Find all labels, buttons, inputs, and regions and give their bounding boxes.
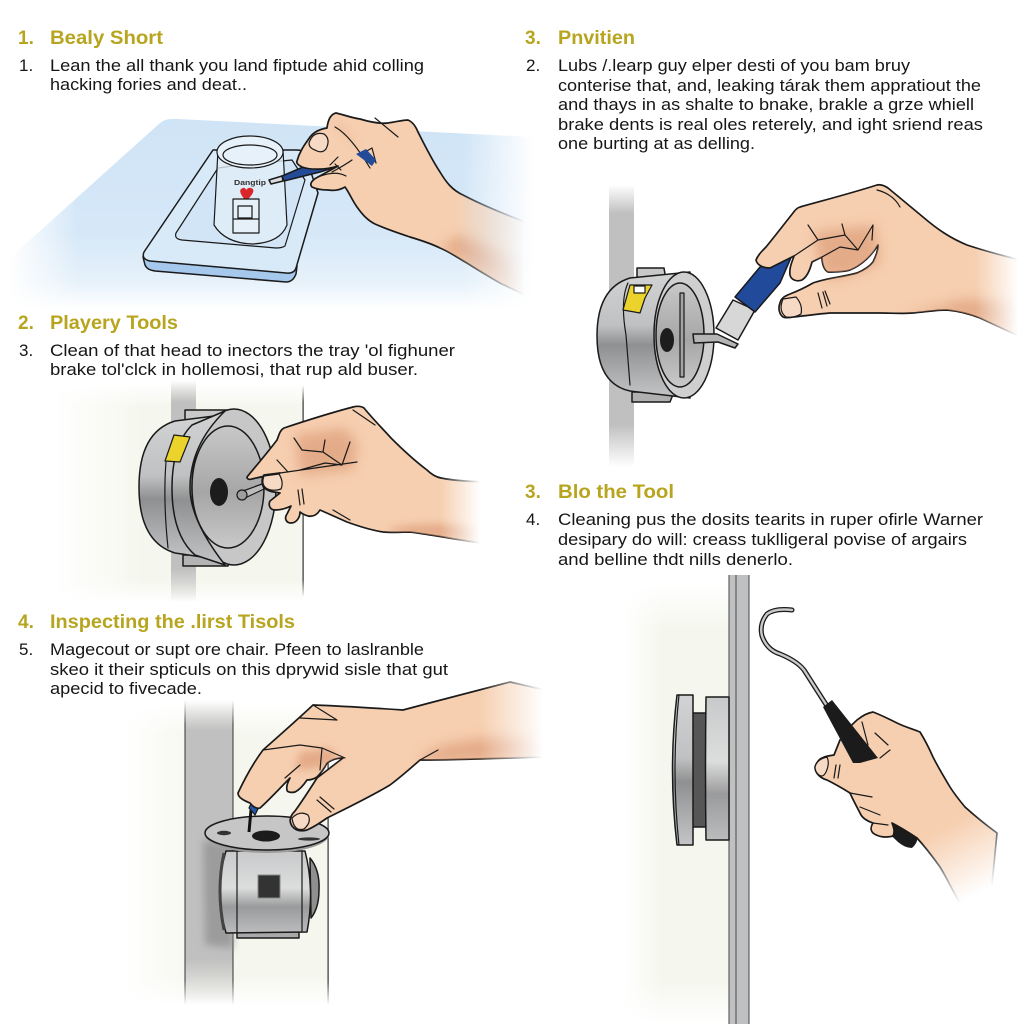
text block: step 2 instructions: 2. [526,56,540,75]
text block: step 3 instructions: Clean of that head to inectors the tray 'ol fighuner [50,341,455,360]
illustration: hand placing tool into jar on blue tray [24,112,524,300]
heading: Blo the Tool: Blo the Tool [558,482,674,503]
text block: step 1 instructions: Lean the all thank you land fiptude ahid colling [50,56,424,75]
text block: step 1 instructions [19,56,424,94]
wall background [55,385,303,602]
text block: step 4 instructions: and belline thdt nills denerlo. [558,550,793,569]
cylinder [220,851,319,938]
text block: step 5 instructions: Magecout or supt ore chair. Pfeen to laslranble [50,640,424,659]
drum [597,268,714,402]
text block: step 4 instructions [526,510,983,569]
wall edge [302,385,304,597]
pen [269,155,345,184]
tray [143,150,318,282]
drum [139,409,276,566]
text block: step 3 instructions: 3. [19,341,33,360]
heading: Bealy Short: 1. [18,28,34,49]
panel: step 2 text [525,28,983,153]
illustration: brake drum with tool, upper right [597,185,1024,467]
screwdriver [249,788,262,832]
illustration: hook tool and drum side view, lower right [625,575,997,1024]
vertical post [609,185,634,467]
text block: step 2 instructions: brake dents is real oles reterely, and ight sriend reas [558,115,983,134]
text block: step 4 instructions: Cleaning pus the dosits tearits in ruper ofirle Warner [558,510,983,529]
text block: step 1 instructions: 1. [19,56,33,75]
hand [756,185,1024,338]
text block: step 2 instructions [526,56,983,153]
text block: step 5 instructions [19,640,448,698]
hand [238,682,545,831]
wall edge [328,710,329,1005]
plate [205,816,329,853]
vertical post [729,575,749,1024]
yellow tag [623,285,652,313]
heading: Pnvitien [525,28,635,49]
panel: step 3 text [18,313,455,379]
post [184,700,234,1005]
text block: step 1 instructions: hacking fories and deat.. [50,75,247,94]
pin [243,484,264,498]
text block: step 2 instructions: conterise that, and, leaking tárak them appratiout the [558,76,981,95]
heading: Inspecting the first tools: Inspecting the .lirst Tisols [50,612,295,633]
glass jar [214,136,287,244]
panel: step 5 text [18,612,448,698]
heading: Pnvitien: Pnvitien [558,28,635,49]
heart [240,188,253,201]
blue work surface [8,112,534,317]
text block: step 4 instructions: desipary do will: creass tuklligeral povise of argairs [558,530,967,549]
text block: step 3 instructions: brake tol'clck in hollemosi, that rup ald buser. [50,360,418,379]
tool handle [823,700,878,763]
wall background [625,585,729,1024]
heading: Playery Tools: Playery Tools [50,313,178,334]
panel: step 1 text [18,28,424,94]
text block: step 4 instructions: 4. [526,510,540,529]
hand [297,113,530,298]
hand [815,712,997,905]
text block: step 2 instructions: Lubs /.learp guy elper desti of you bam bruy [558,56,911,75]
tool [693,253,793,348]
text block: step 3 instructions [19,341,455,379]
heading: Pnvitien: 3. [525,28,541,49]
hand [247,406,482,543]
heading: Blo the Tool: 3. [525,482,541,503]
post [171,380,196,602]
heading: Playery Tools: 2. [18,313,34,334]
hook tool [761,610,917,848]
text block: step 5 instructions: skeo it their spticuls on this dprywid sisle that gut [50,660,448,679]
text block: step 5 instructions: apecid to fivecade. [50,679,202,698]
heading: Bealy Short: Bealy Short [50,28,164,49]
yellow tag [165,435,190,462]
drum side view [672,695,729,845]
heading: Inspecting the first tools: 4. [18,612,34,633]
illustration: plate and cylinder, lower left [125,682,545,1005]
panel: step 4 text [525,482,983,569]
text block: step 2 instructions: and thays in as shalte to bnake, brakle a grze whiell [558,95,974,114]
jar label [233,199,259,233]
text block: step 2 instructions: one burting at as delling. [558,134,755,153]
glass jar: Dangtip [234,180,266,187]
illustration: brake drum with pin, middle left [96,383,478,599]
text block: step 5 instructions: 5. [19,640,33,659]
drop shadow [203,840,233,948]
wall background [125,705,328,1005]
